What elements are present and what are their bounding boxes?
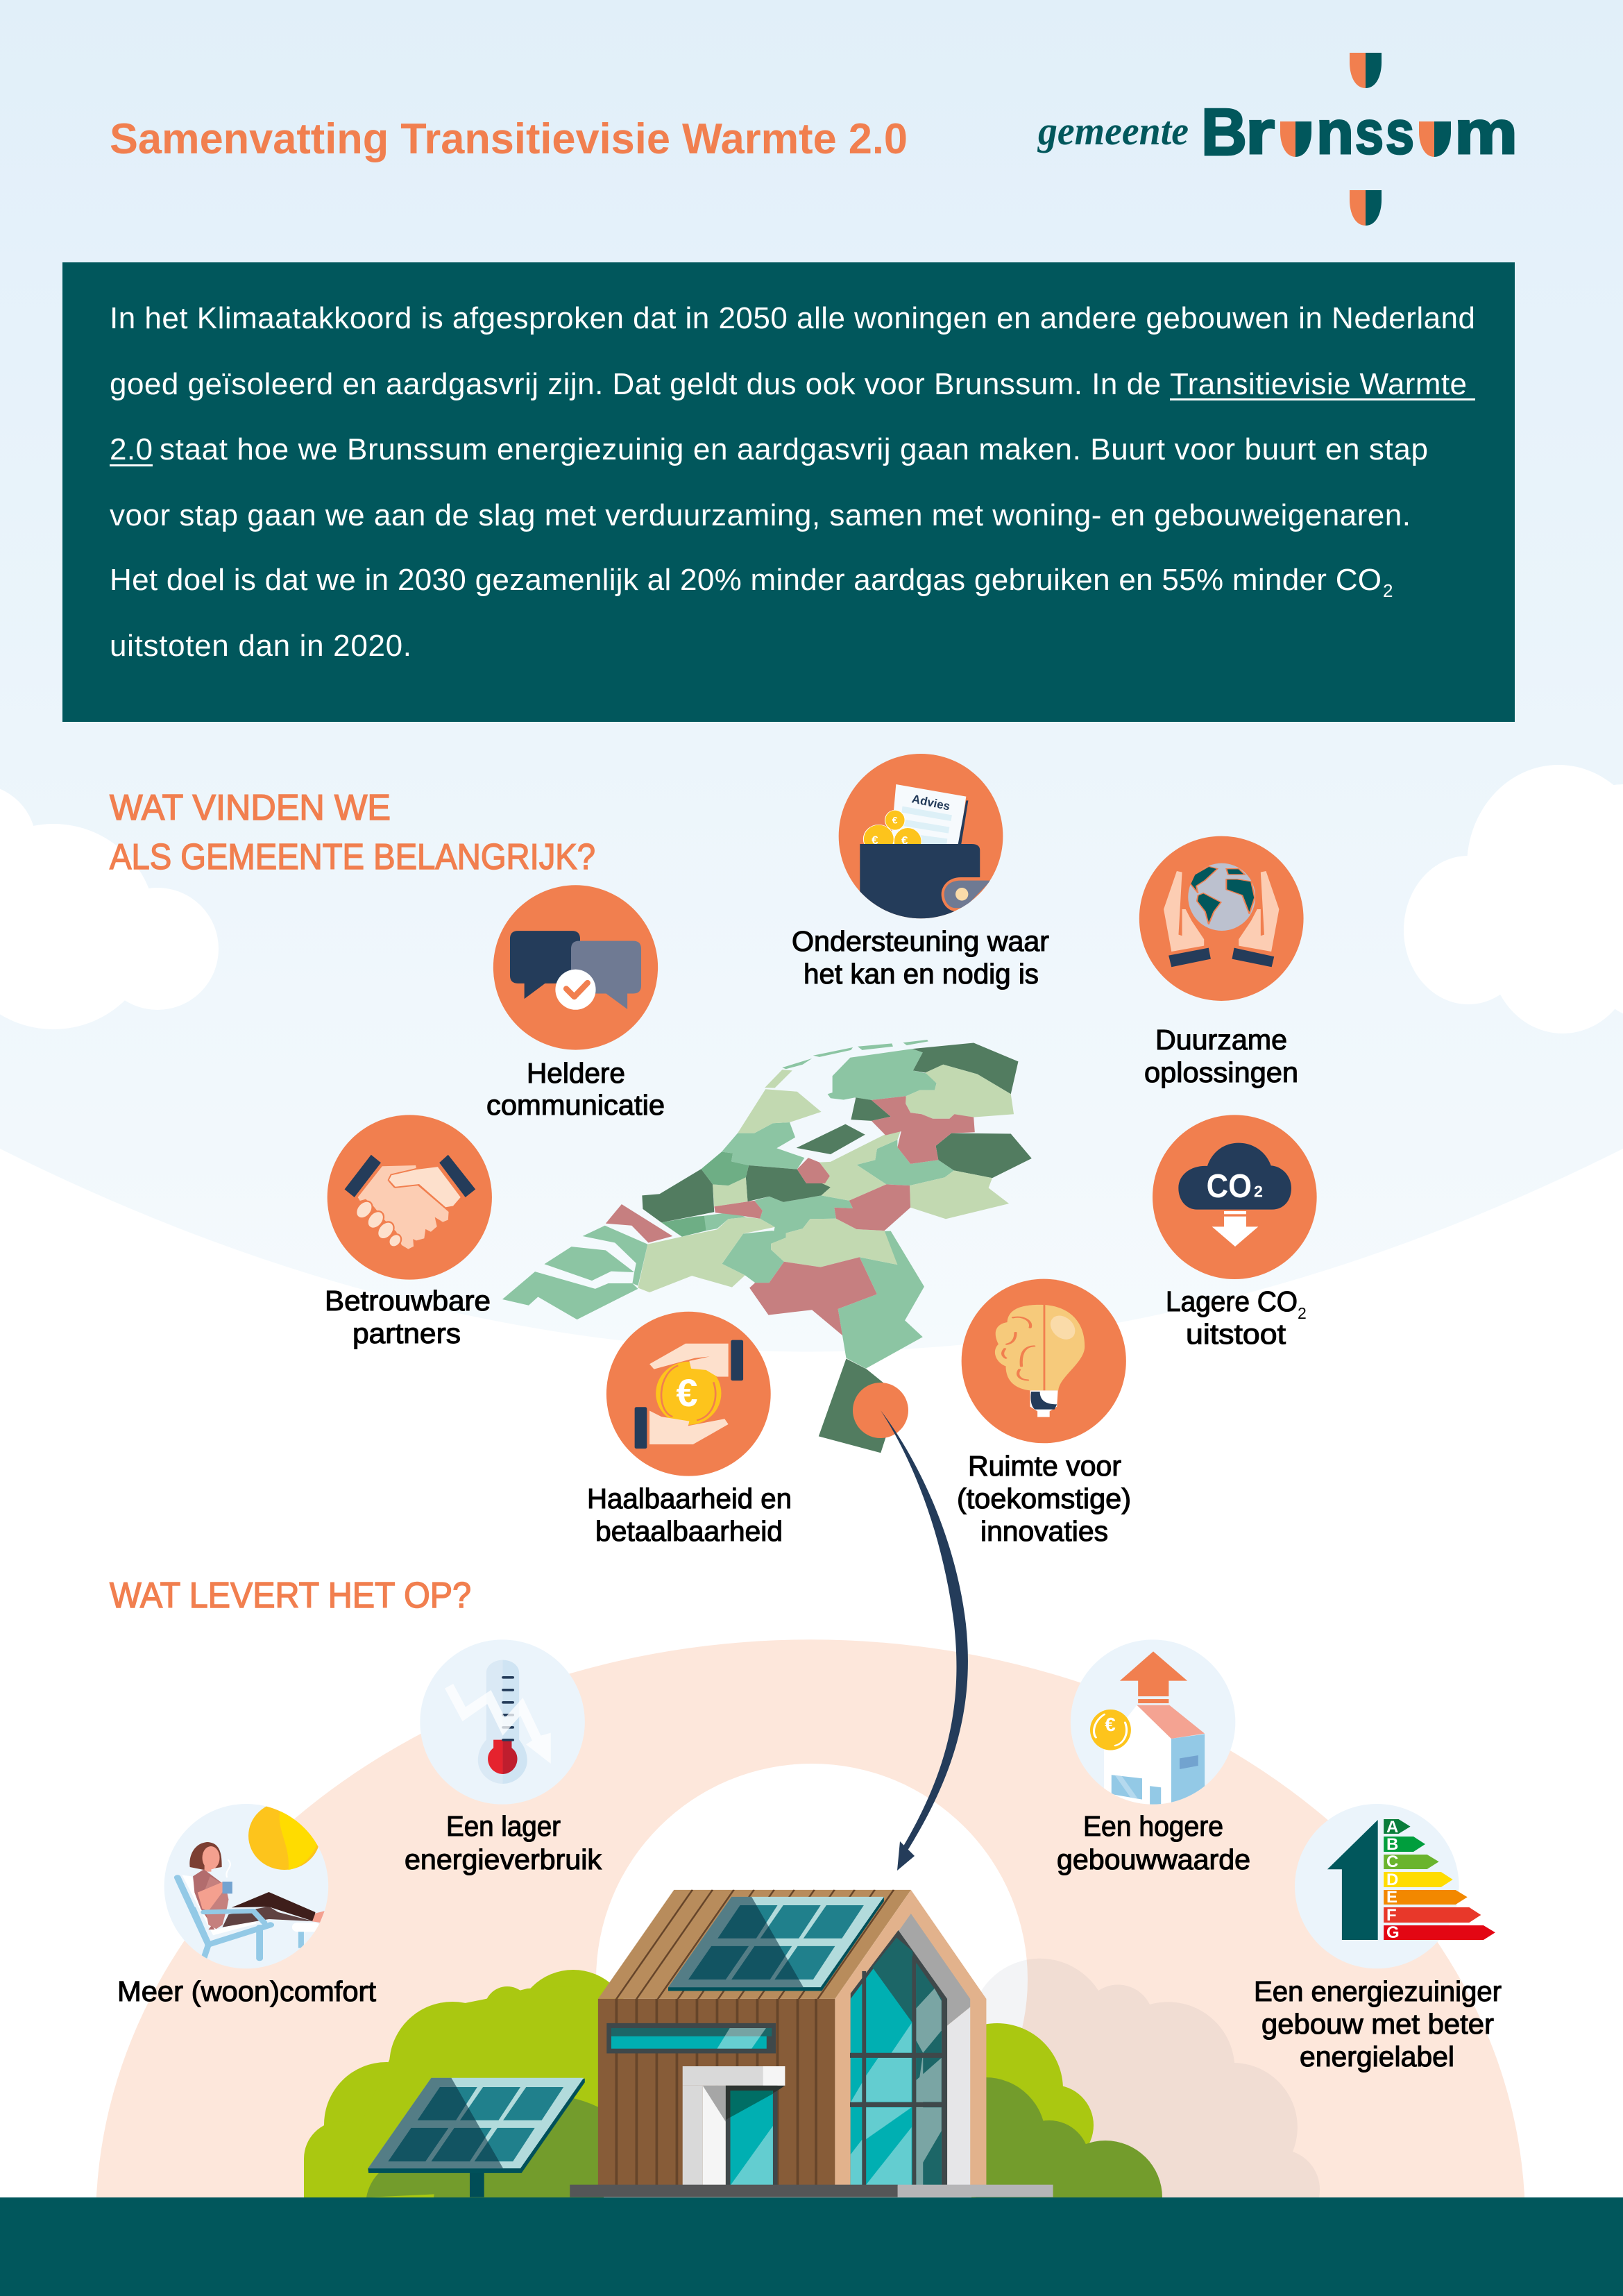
bushes right beige <box>971 1959 1320 2197</box>
icon: advice and wallet: € <box>892 815 898 826</box>
panel: introduction: Het doel is dat we in 2030 gezamenlijk al 20% minder aardgas gebruiken en 55% minder CO <box>110 563 1382 597</box>
label: haalbaarheid en betaalbaarheid: Haalbaarheid en <box>587 1483 792 1514</box>
icon: hands with euro coin <box>606 1312 771 1476</box>
cloud left <box>0 784 219 1029</box>
label: energiezuiniger gebouw: energielabel <box>1300 2041 1454 2073</box>
house <box>570 1890 1053 2197</box>
logo: gemeente Brunssum: r <box>1246 98 1275 167</box>
label: haalbaarheid en betaalbaarheid: betaalbaarheid <box>595 1515 783 1547</box>
arrow from Brunssum to house <box>881 1410 968 1871</box>
label: lager energieverbruik: Een lager <box>446 1810 561 1842</box>
icon text: euro sign: € <box>676 1371 698 1415</box>
footer band <box>0 2197 1623 2296</box>
icon: advice and wallet <box>839 754 1003 921</box>
logo: gemeente Brunssum: u <box>1285 112 1306 155</box>
label: heldere communicatie: communicatie <box>486 1089 665 1121</box>
label: betrouwbare partners <box>325 1285 491 1349</box>
label: lagere CO2 uitstoot: 2 <box>1298 1304 1307 1322</box>
logo: gemeente Brunssum: n <box>1316 98 1354 167</box>
icon: house value <box>1071 1639 1235 1809</box>
map marker: Brunssum <box>853 1383 908 1438</box>
panel: introduction: voor stap gaan we aan de slag met verduurzaming, samen met woning- en gebouweigenaren. <box>110 498 1411 532</box>
label: meer woon comfort: Meer (woon)comfort <box>117 1975 377 2007</box>
logo: gemeente Brunssum: m <box>1454 98 1518 167</box>
icon: energy label: B <box>1386 1835 1398 1854</box>
label: lagere CO2 uitstoot <box>1166 1285 1307 1350</box>
title: Samenvatting Transitievisie Warmte 2.0 <box>110 115 908 163</box>
label: lager energieverbruik: energieverbruik <box>405 1843 602 1875</box>
heading: wat vinden we als gemeente belangrijk <box>110 788 595 877</box>
icon: energy label: D <box>1386 1871 1398 1889</box>
panel: introduction: Transitievisie Warmte <box>1170 367 1467 401</box>
icon: speech bubbles <box>493 885 658 1050</box>
panel: introduction: In het Klimaatakkoord is afgesproken dat in 2050 alle woningen en andere gebouwen in Nederland <box>110 301 1475 335</box>
logo: gemeente Brunssum: B <box>1201 95 1247 169</box>
label: lagere CO2 uitstoot: uitstoot <box>1186 1318 1286 1350</box>
peach background arc <box>96 1639 1525 2221</box>
label: ruimte voor innovaties <box>957 1450 1131 1547</box>
label: ondersteuning: het kan en nodig is <box>804 958 1039 990</box>
icon: thermometer <box>420 1639 585 1805</box>
label: ruimte voor innovaties: innovaties <box>980 1515 1108 1547</box>
label: lagere CO2 uitstoot: Lagere CO <box>1166 1285 1298 1317</box>
label: lager energieverbruik <box>405 1810 602 1875</box>
heading: wat vinden we als gemeente belangrijk: ALS GEMEENTE BELANGRIJK? <box>110 837 595 877</box>
panel: introduction: uitstoten dan in 2020. <box>110 629 411 663</box>
logo: gemeente Brunssum: gemeente <box>1037 108 1189 153</box>
logo: gemeente Brunssum: s <box>1386 98 1414 167</box>
panel: introduction <box>62 262 1515 722</box>
icon: energy label: A <box>1386 1818 1398 1837</box>
panel: introduction: 2.0 <box>110 432 153 466</box>
cloud right <box>1404 765 1623 1033</box>
solar panel in garden <box>368 2078 585 2197</box>
label: energiezuiniger gebouw: Een energiezuiniger <box>1254 1975 1502 2007</box>
icon: advice and wallet: € <box>901 834 908 847</box>
icon: energy label: C <box>1386 1852 1398 1871</box>
icon: CO2 cloud: 2 <box>1254 1183 1263 1201</box>
icon: brain bulb <box>962 1279 1126 1443</box>
panel: introduction: goed geïsoleerd en aardgasvrij zijn. Dat geldt dus ook voor Brunssum. In de <box>110 367 1161 401</box>
heading: wat levert het op: WAT LEVERT HET OP? <box>110 1576 471 1616</box>
icon: advice and wallet: € <box>872 834 878 847</box>
panel: introduction: staat hoe we Brunssum energiezuinig en aardgasvrij gaan maken. Buurt voor buurt en stap <box>160 432 1428 466</box>
icon: energy label: E <box>1386 1888 1397 1907</box>
label: hogere gebouwwaarde <box>1057 1810 1250 1875</box>
label: heldere communicatie <box>486 1057 665 1121</box>
logo: gemeente Brunssum: u <box>1424 112 1445 155</box>
label: heldere communicatie: Heldere <box>527 1057 625 1089</box>
icon: CO2 cloud: CO <box>1207 1167 1252 1205</box>
panel: introduction: 2 <box>1383 580 1393 601</box>
label: energiezuiniger gebouw: gebouw met beter <box>1261 2008 1494 2040</box>
sky background <box>0 0 1623 1352</box>
label: betrouwbare partners: partners <box>352 1317 461 1349</box>
label: ondersteuning: Ondersteuning waar <box>792 925 1049 957</box>
icon: energy label: F <box>1386 1906 1397 1925</box>
solar panel on roof <box>668 1897 884 1991</box>
map of the Netherlands <box>502 1040 1032 1453</box>
bushes left <box>304 1970 631 2197</box>
icon: woman relaxing in chair <box>164 1802 328 1968</box>
label: hogere gebouwwaarde: gebouwwaarde <box>1057 1843 1250 1875</box>
label: duurzame oplossingen: oplossingen <box>1144 1056 1298 1088</box>
label: hogere gebouwwaarde: Een hogere <box>1083 1810 1223 1842</box>
label: duurzame oplossingen: Duurzame <box>1155 1024 1287 1056</box>
logo: gemeente Brunssum: s <box>1355 98 1384 167</box>
heading: wat vinden we als gemeente belangrijk: WAT VINDEN WE <box>110 788 391 828</box>
label: energiezuiniger gebouw <box>1254 1975 1502 2073</box>
icon: hands holding globe <box>1139 836 1304 1001</box>
label: ruimte voor innovaties: (toekomstige) <box>957 1483 1131 1514</box>
label: betrouwbare partners: Betrouwbare <box>325 1285 491 1317</box>
icon: energy label <box>1295 1804 1495 1968</box>
icon: handshake <box>328 1115 492 1280</box>
label: ruimte voor innovaties: Ruimte voor <box>968 1450 1121 1482</box>
label: haalbaarheid en betaalbaarheid <box>587 1483 792 1547</box>
logo: gemeente Brunssum <box>1037 53 1518 226</box>
label: duurzame oplossingen <box>1144 1024 1298 1088</box>
white inner arc <box>596 1764 1028 2195</box>
icon: advice and wallet: Advies <box>910 792 951 813</box>
label: ondersteuning <box>792 925 1049 990</box>
icon: energy label: G <box>1386 1923 1400 1942</box>
icon: CO2 cloud <box>1153 1115 1317 1279</box>
bushes right <box>925 2023 1162 2201</box>
icon text: euro sign on coin: € <box>1105 1714 1116 1735</box>
